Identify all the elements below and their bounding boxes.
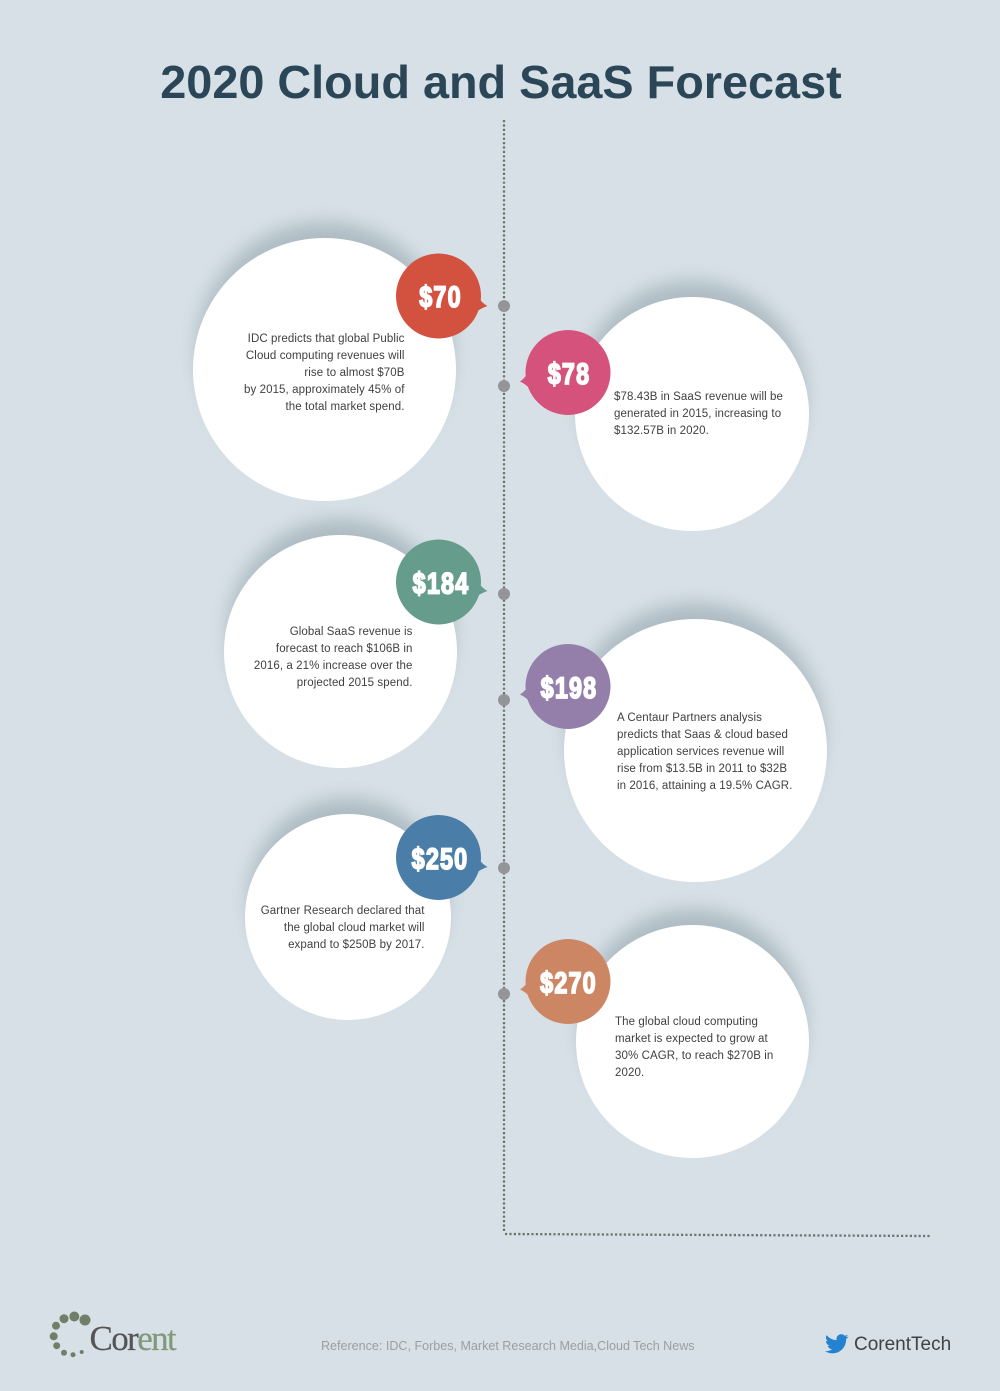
badge: $184 (396, 540, 488, 624)
text: $250 description (261, 905, 425, 951)
text: $270 description: market is expected to grow at (615, 1033, 769, 1045)
text: $184 description: forecast to reach $106B in (276, 643, 412, 655)
text: $78 description: generated in 2015, increasing to (614, 408, 781, 420)
badge: $70: $70 (419, 280, 462, 314)
badge: $78 (520, 330, 610, 415)
text: $184 description (254, 626, 413, 689)
logo: Corent: Corent (90, 1319, 177, 1358)
badge: $270 (520, 939, 610, 1024)
badge: $198: $198 (541, 671, 597, 705)
text: $270 description: 30% CAGR, to reach $270B in (615, 1050, 773, 1062)
badge: $184: $184 (413, 567, 469, 600)
text: $78 description (614, 391, 783, 437)
text: $270 description: 2020. (615, 1067, 644, 1079)
text: $78 description: $132.57B in 2020. (614, 425, 709, 437)
text: $198 description: A Centaur Partners analysis (617, 712, 762, 724)
text: $198 description: rise from $13.5B in 2011 to $32B (617, 763, 787, 775)
panel: $198 Centaur Partners (564, 603, 827, 882)
badge: $250 (396, 815, 488, 900)
text: $198 description: predicts that Saas & cloud based (617, 729, 788, 741)
logo: Corent (50, 1312, 177, 1358)
panel: $184 global SaaS (224, 519, 457, 768)
text: $250 description: Gartner Research declared that (261, 905, 425, 917)
text: $198 description: in 2016, attaining a 19.5% CAGR. (617, 780, 792, 792)
text: $270 description: The global cloud computing (615, 1016, 758, 1028)
text: $78 description: $78.43B in SaaS revenue will be (614, 391, 783, 403)
reference note: Reference: IDC, Forbes, Market Research Media,Cloud Tech News (321, 1339, 695, 1353)
panel: $78 SaaS revenue (575, 281, 809, 531)
twitter handle: CorentTech (854, 1334, 951, 1355)
badge: $250: $250 (412, 842, 468, 876)
icon: twitter bird (825, 1334, 849, 1353)
badge: $78: $78 (548, 357, 590, 391)
timeline axis (504, 120, 930, 1236)
panel: $70 public cloud (193, 222, 456, 501)
timeline node markers (498, 300, 510, 1000)
text: $184 description: Global SaaS revenue is (290, 626, 413, 638)
text: $70 description: Cloud computing revenues will (246, 350, 404, 362)
text: $250 description: the global cloud market will (284, 922, 424, 934)
text: $70 description: rise to almost $70B (304, 367, 405, 379)
text: $184 description: projected 2015 spend. (297, 677, 412, 689)
badge: $198 (520, 644, 610, 729)
text: $250 description: expand to $250B by 2017. (288, 939, 424, 951)
text: $70 description: by 2015, approximately 45% of (244, 384, 405, 396)
text: $198 description: application services revenue will (617, 746, 784, 758)
text: $70 description: the total market spend. (285, 401, 404, 413)
text: $270 description (615, 1016, 773, 1079)
text: $70 description (244, 333, 405, 413)
badge: $270: $270 (540, 966, 597, 1000)
title: 2020 Cloud and SaaS Forecast (160, 56, 842, 108)
panel: $250 Gartner (245, 798, 451, 1020)
panel: $270 cloud market (576, 909, 809, 1158)
text: $198 description (617, 712, 792, 792)
badge: $70 (396, 254, 488, 338)
text: $70 description: IDC predicts that global Public (248, 333, 405, 345)
text: $184 description: 2016, a 21% increase over the (254, 660, 412, 672)
